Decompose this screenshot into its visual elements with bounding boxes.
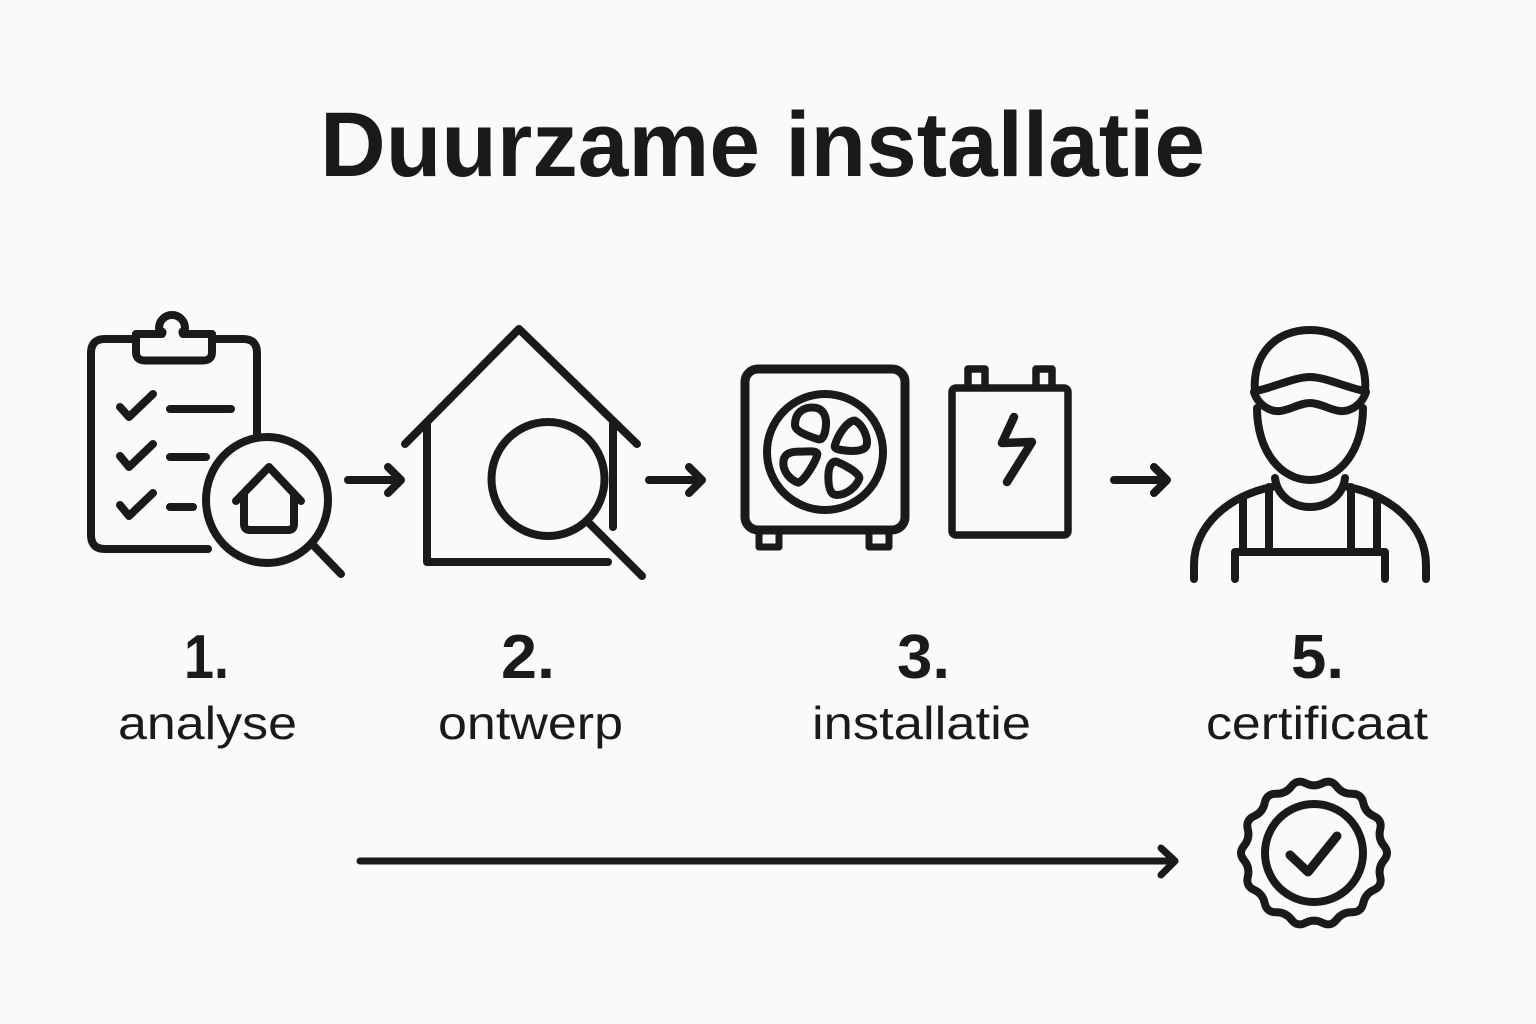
step 2 label: 2. xyxy=(501,623,555,692)
step 3 label xyxy=(812,623,1031,749)
icon: battery xyxy=(952,369,1068,535)
icon: installer with cap xyxy=(1194,330,1426,579)
step 5 label: certificaat xyxy=(1206,697,1428,749)
step 2 label: ontwerp xyxy=(438,697,623,749)
step 1 label: analyse xyxy=(118,697,297,749)
step 3 label: installatie xyxy=(812,697,1031,749)
icon: clipboard with checklist and magnifier xyxy=(91,315,341,574)
step 1 label xyxy=(118,623,297,749)
step 2 label xyxy=(438,623,623,749)
step 5 label: 5. xyxy=(1291,623,1344,692)
arrow: long arrow to certificate xyxy=(360,848,1175,875)
icon: heat pump unit xyxy=(745,369,905,547)
icon: house with magnifier xyxy=(405,329,642,576)
title: Duurzame installatie xyxy=(320,94,1205,196)
arrow: step 2 to 3 xyxy=(649,467,702,493)
step 1 label: 1. xyxy=(184,623,229,692)
arrow: step 3 to 5 xyxy=(1114,467,1167,493)
icon: certificate badge xyxy=(1241,782,1387,924)
step 5 label xyxy=(1206,623,1428,749)
step 3 label: 3. xyxy=(897,623,950,692)
arrow: step 1 to 2 xyxy=(348,467,401,493)
